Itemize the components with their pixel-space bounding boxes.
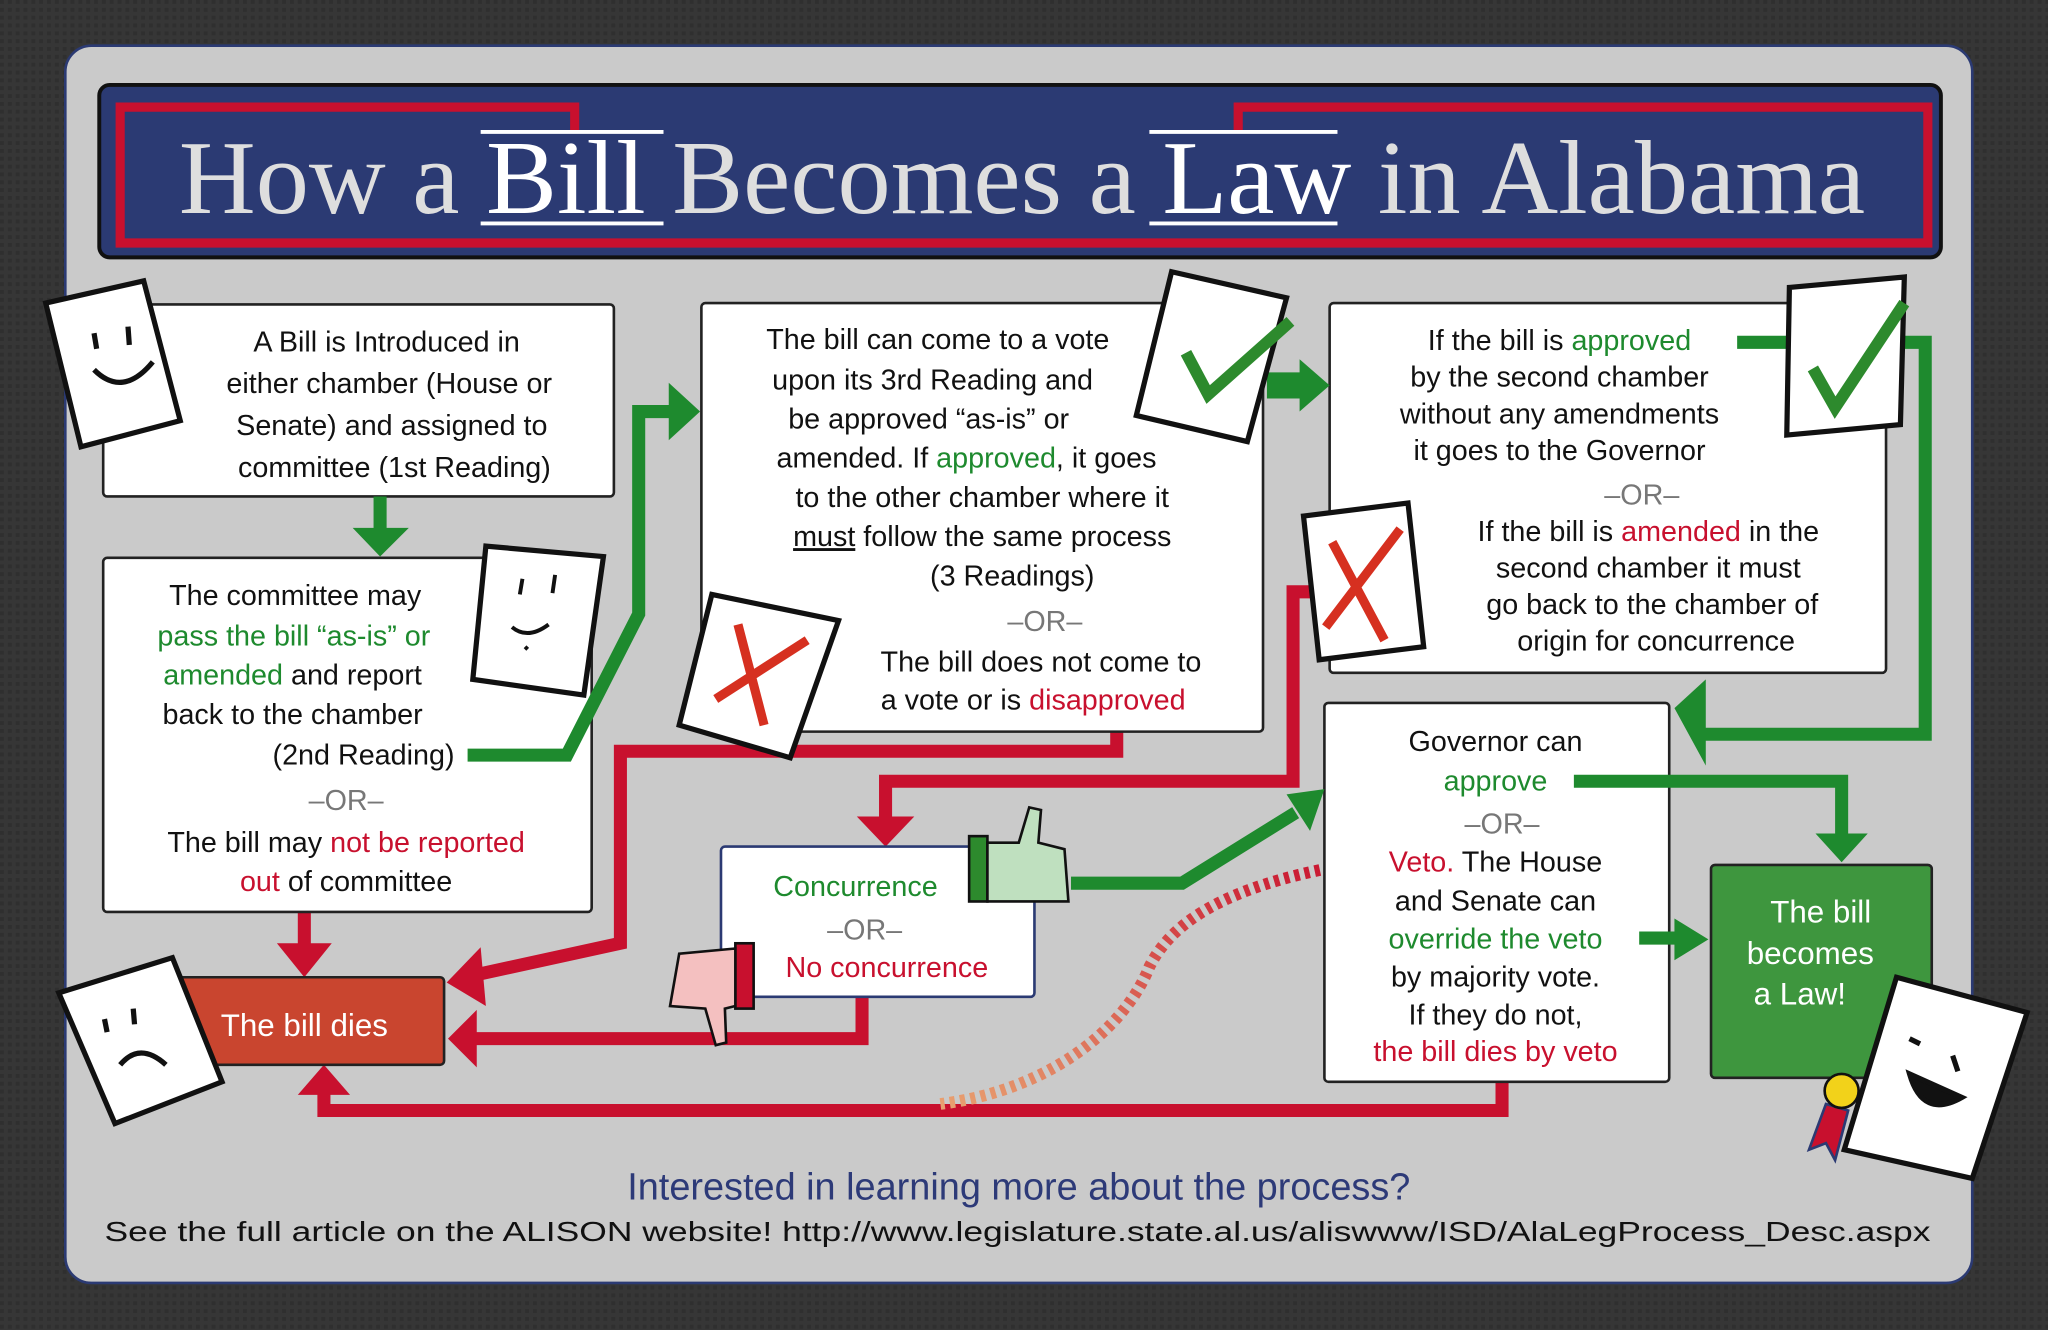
box 1: Senate) and assigned to	[236, 410, 547, 442]
title: How a Bill Becomes a Law in Alabama	[179, 120, 1865, 236]
box 3: must follow the same process	[793, 521, 1171, 553]
box 1	[103, 304, 614, 496]
icon: neutral paper	[473, 546, 603, 695]
box 2: (2nd Reading)	[273, 739, 455, 771]
icon: check paper 2	[1787, 277, 1904, 435]
law box	[1711, 865, 1932, 1078]
law box: a Law!	[1754, 977, 1846, 1012]
governor box: –OR–	[1465, 809, 1540, 841]
icon: happy paper with rosette	[1809, 977, 2027, 1178]
box 1: either chamber (House or	[226, 368, 552, 400]
governor box: approve	[1444, 765, 1547, 797]
icon: check paper 1	[1136, 272, 1290, 442]
box 3: The bill does not come to	[881, 647, 1201, 679]
box 2	[103, 558, 592, 912]
dies box: The bill dies	[221, 1008, 388, 1043]
box 3: a vote or is disapproved	[881, 684, 1186, 716]
green arrows	[380, 342, 1925, 938]
governor box: override the veto	[1389, 924, 1602, 956]
governor box: the bill dies by veto	[1373, 1036, 1618, 1068]
box 4: go back to the chamber of	[1486, 589, 1819, 621]
icon: X paper 1	[679, 594, 839, 758]
box 3: The bill can come to a vote	[766, 324, 1109, 356]
box 3: amended. If approved, it goes	[777, 443, 1157, 475]
box 3: (3 Readings)	[930, 560, 1094, 592]
concurrence box: –OR–	[827, 914, 902, 946]
icon: thumbs up	[969, 807, 1068, 901]
red arrows	[304, 592, 1502, 1111]
governor box: If they do not,	[1409, 999, 1583, 1031]
box 4: it goes to the Governor	[1413, 435, 1706, 467]
governor box: and Senate can	[1395, 886, 1596, 918]
box 4: origin for concurrence	[1517, 626, 1795, 658]
concurrence box: No concurrence	[786, 952, 988, 984]
box 2: The committee may	[169, 580, 422, 612]
governor box	[1324, 703, 1669, 1082]
green arrowheads	[353, 359, 1868, 960]
governor box: by majority vote.	[1391, 961, 1600, 993]
governor box: Governor can	[1409, 726, 1582, 758]
box 1: committee (1st Reading)	[238, 452, 551, 484]
box 4: without any amendments	[1399, 398, 1719, 430]
box 3: –OR–	[1007, 606, 1082, 638]
title banner	[99, 85, 1941, 257]
box 2: back to the chamber	[162, 699, 423, 731]
box 3: be approved “as-is” or	[788, 404, 1070, 436]
box 4: If the bill is amended in the	[1478, 516, 1819, 548]
box 2: out of committee	[240, 866, 452, 898]
icon: thumbs down	[670, 943, 754, 1045]
law box: becomes	[1747, 936, 1874, 971]
box 2: The bill may not be reported	[167, 827, 525, 859]
dotted veto override	[940, 862, 1361, 1104]
box 2: –OR–	[309, 785, 384, 817]
footer heading: Interested in learning more about the process?	[627, 1166, 1410, 1208]
concurrence box: Concurrence	[773, 871, 938, 903]
box 4: –OR–	[1604, 479, 1679, 511]
footer link text: See the full article on the ALISON website! http://www.legislature.state.al.us/aliswww/ISD/AlaLegProcess_Desc.aspx	[104, 1216, 1931, 1247]
concurrence box	[721, 847, 1034, 997]
box 4: by the second chamber	[1410, 362, 1709, 394]
dies box	[163, 977, 444, 1065]
box 2: pass the bill “as-is” or	[157, 620, 431, 652]
box 3: upon its 3rd Reading and	[772, 364, 1093, 396]
box 4: second chamber it must	[1496, 552, 1801, 584]
law box: The bill	[1770, 894, 1871, 929]
box 3: to the other chamber where it	[795, 482, 1169, 514]
box 3	[701, 303, 1263, 732]
governor box: Veto. The House	[1389, 846, 1602, 878]
red arrowheads	[277, 817, 914, 1095]
box 4: If the bill is approved	[1428, 325, 1691, 357]
icon: sad paper	[59, 958, 222, 1124]
icon: smiling paper	[46, 281, 180, 447]
box 2: amended and report	[163, 660, 422, 692]
box 4	[1330, 303, 1886, 673]
box 1: A Bill is Introduced in	[253, 326, 520, 358]
icon: X paper 2	[1304, 503, 1424, 660]
